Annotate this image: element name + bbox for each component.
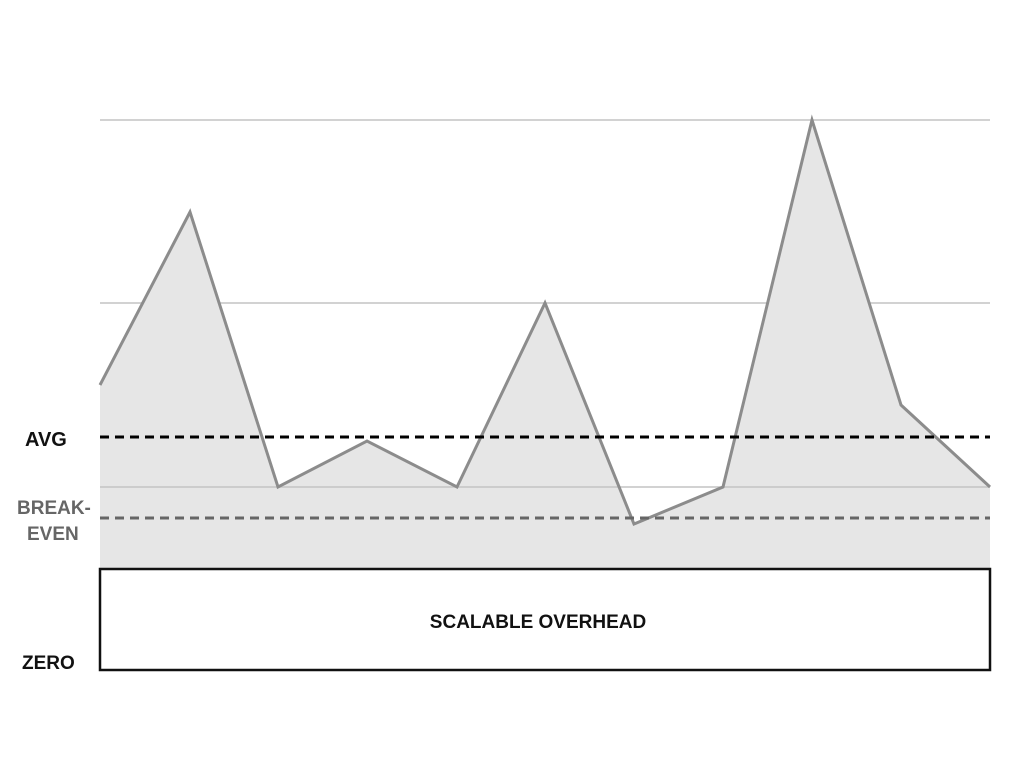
box: scalable overhead bbox=[100, 569, 990, 670]
label: AVG: AVG bbox=[25, 429, 67, 451]
label: break-even: BREAK- bbox=[17, 498, 91, 519]
label: zero: ZERO bbox=[22, 653, 75, 674]
label: break-even bbox=[17, 498, 91, 545]
line: break-even bbox=[100, 516, 990, 520]
line: average bbox=[100, 436, 990, 438]
label: break-even: EVEN bbox=[27, 524, 79, 545]
box: scalable overhead: SCALABLE OVERHEAD bbox=[430, 612, 646, 633]
area: revenue bbox=[100, 120, 990, 568]
